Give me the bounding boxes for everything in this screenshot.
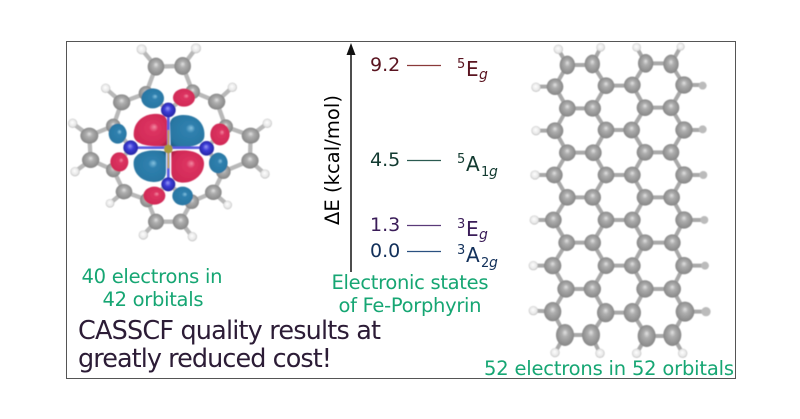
hydrogen atoms xyxy=(529,43,711,358)
carbon atoms xyxy=(80,57,260,230)
energy level: 3A2g: 0.0 xyxy=(370,240,400,262)
carbon atoms xyxy=(544,54,694,347)
label: 40 electrons: 40 electrons in xyxy=(82,265,222,288)
energy level: 5A1g xyxy=(370,149,498,180)
energy level: 5Eg: g xyxy=(479,67,488,83)
conclusion text: greatly reduced cost! xyxy=(78,344,332,374)
energy level: 5A1g: A xyxy=(466,152,480,176)
energy level: 3A2g: 2 xyxy=(481,256,489,271)
energy level: 5Eg: E xyxy=(466,57,479,81)
energy level: 5Eg xyxy=(370,54,488,83)
energy level: 5A1g: 4.5 xyxy=(370,149,400,171)
energy level: 5Eg: 5 xyxy=(457,57,465,72)
energy axis arrow xyxy=(346,43,356,272)
energy level: 3Eg: E xyxy=(466,217,479,241)
energy level: 3A2g: g xyxy=(489,255,498,271)
energy level: 3A2g: 3 xyxy=(457,243,465,258)
energy level: 3A2g xyxy=(370,240,498,271)
energy level: 5Eg: 9.2 xyxy=(370,54,400,76)
energy level: 3Eg xyxy=(370,214,488,243)
graphene-like molecule xyxy=(529,43,711,358)
energy level: 3Eg: g xyxy=(479,227,488,243)
energy level: 5A1g: g xyxy=(489,164,498,180)
label: electronic states xyxy=(332,271,488,317)
label: electronic states: of Fe-Porphyrin xyxy=(338,294,482,317)
porphyrin bonds xyxy=(73,48,267,237)
conclusion text: CASSCF quality results at xyxy=(78,316,381,346)
label: 40 electrons: 42 orbitals xyxy=(102,288,204,311)
conclusion text xyxy=(78,316,381,374)
frame xyxy=(66,42,736,378)
small orbital lobes xyxy=(109,88,230,205)
porphyrin molecule with orbital lobes xyxy=(68,43,272,241)
molecule bonds xyxy=(533,47,706,353)
energy level: 5A1g: 1 xyxy=(481,165,489,180)
energy level: 3A2g: A xyxy=(466,243,480,267)
energy level: 3Eg: 1.3 xyxy=(370,214,400,236)
hydrogen atoms xyxy=(68,43,272,241)
label: 40 electrons xyxy=(82,265,222,311)
nitrogen and iron atoms xyxy=(123,103,214,191)
energy level: 5A1g: 5 xyxy=(457,152,465,167)
label: 52 electrons: 52 electrons in 52 orbitals xyxy=(484,357,734,380)
large d orbital lobes xyxy=(134,114,204,183)
label: electronic states: Electronic states xyxy=(332,271,488,294)
energy level: 3Eg: 3 xyxy=(457,217,465,232)
energy axis label: ΔE (kcal/mol) xyxy=(321,95,344,225)
